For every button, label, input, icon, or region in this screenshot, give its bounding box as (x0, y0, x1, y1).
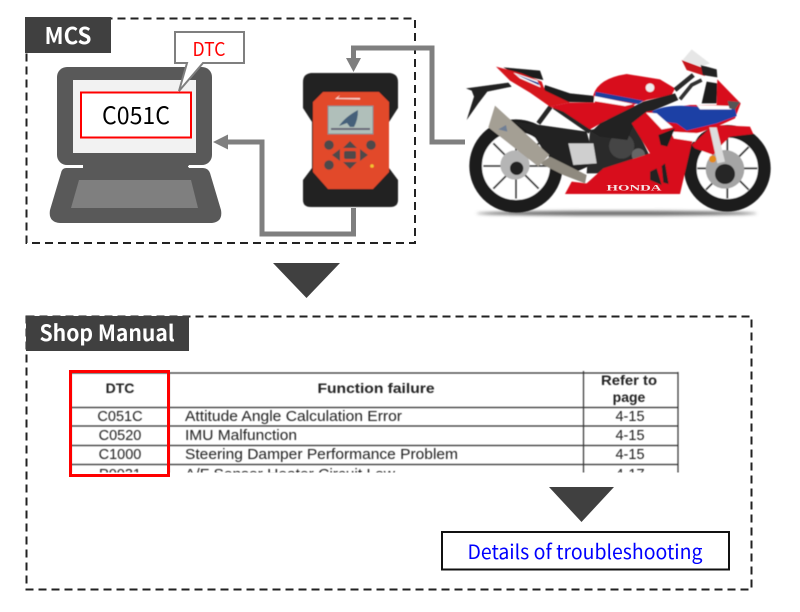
table: DTC list: IMU Malfunction (185, 428, 297, 444)
DTC value box: C051C (102, 96, 170, 131)
handlebar and cockpit (675, 75, 693, 90)
table: DTC list: Steering Damper Performance Problem (185, 447, 458, 463)
icon: laptop (50, 67, 221, 223)
table: DTC list: C051C (97, 409, 143, 425)
HONDA logo: HONDA (606, 184, 661, 193)
table: DTC list: P0031 (99, 467, 141, 483)
table: DTC list (70, 371, 678, 483)
black frame spar (592, 93, 678, 140)
DTC value box (81, 92, 191, 138)
table: DTC list: Function failure (318, 380, 435, 396)
table: DTC list: C0520 (99, 428, 141, 444)
table: DTC list: 4-15 (615, 409, 645, 425)
heading: MCS (25, 17, 111, 53)
rear wheel (476, 126, 556, 206)
arrow: tool to laptop (213, 134, 354, 234)
table: DTC list: A/F Sensor Heater Circuit Low (185, 467, 396, 483)
table: DTC list: 4-17 (615, 467, 645, 483)
icon: diagnostic tool (303, 73, 398, 207)
tail fairing (496, 67, 570, 107)
exhaust (540, 157, 587, 183)
table: DTC list: Attitude Angle Calculation Error (185, 409, 402, 425)
heading: Shop Manual: Shop Manual (40, 316, 175, 348)
fuel tank (550, 74, 675, 129)
panel: MCS (25, 17, 465, 243)
swingarm and hugger (513, 122, 595, 172)
engine (587, 122, 650, 173)
arrow: down to details (549, 487, 614, 522)
box: details of troubleshooting (442, 532, 729, 570)
seat (503, 67, 543, 80)
callout: DTC: DTC (192, 35, 226, 62)
box: details of troubleshooting: Details of troubleshooting (468, 536, 702, 565)
DTC column highlight (70, 372, 168, 476)
panel: Shop Manual (26, 316, 752, 590)
table: DTC list: C1000 (99, 447, 141, 463)
callout: DTC (175, 32, 244, 91)
table: DTC list: Refer to (601, 372, 657, 388)
front mudguard and fork (692, 125, 753, 155)
table: DTC list: page (613, 389, 646, 405)
image: motorcycle (466, 49, 764, 216)
table: DTC list: DTC (106, 380, 134, 396)
heading: MCS: MCS (44, 17, 92, 51)
front wheel (690, 131, 764, 205)
table: DTC list: 4-15 (615, 428, 645, 444)
arrow: down to Shop Manual (273, 263, 340, 298)
arrow: motorcycle to tool (346, 48, 465, 142)
tail bracket (466, 83, 512, 120)
front fairing (565, 79, 741, 194)
table: DTC list: 4-15 (615, 447, 645, 463)
